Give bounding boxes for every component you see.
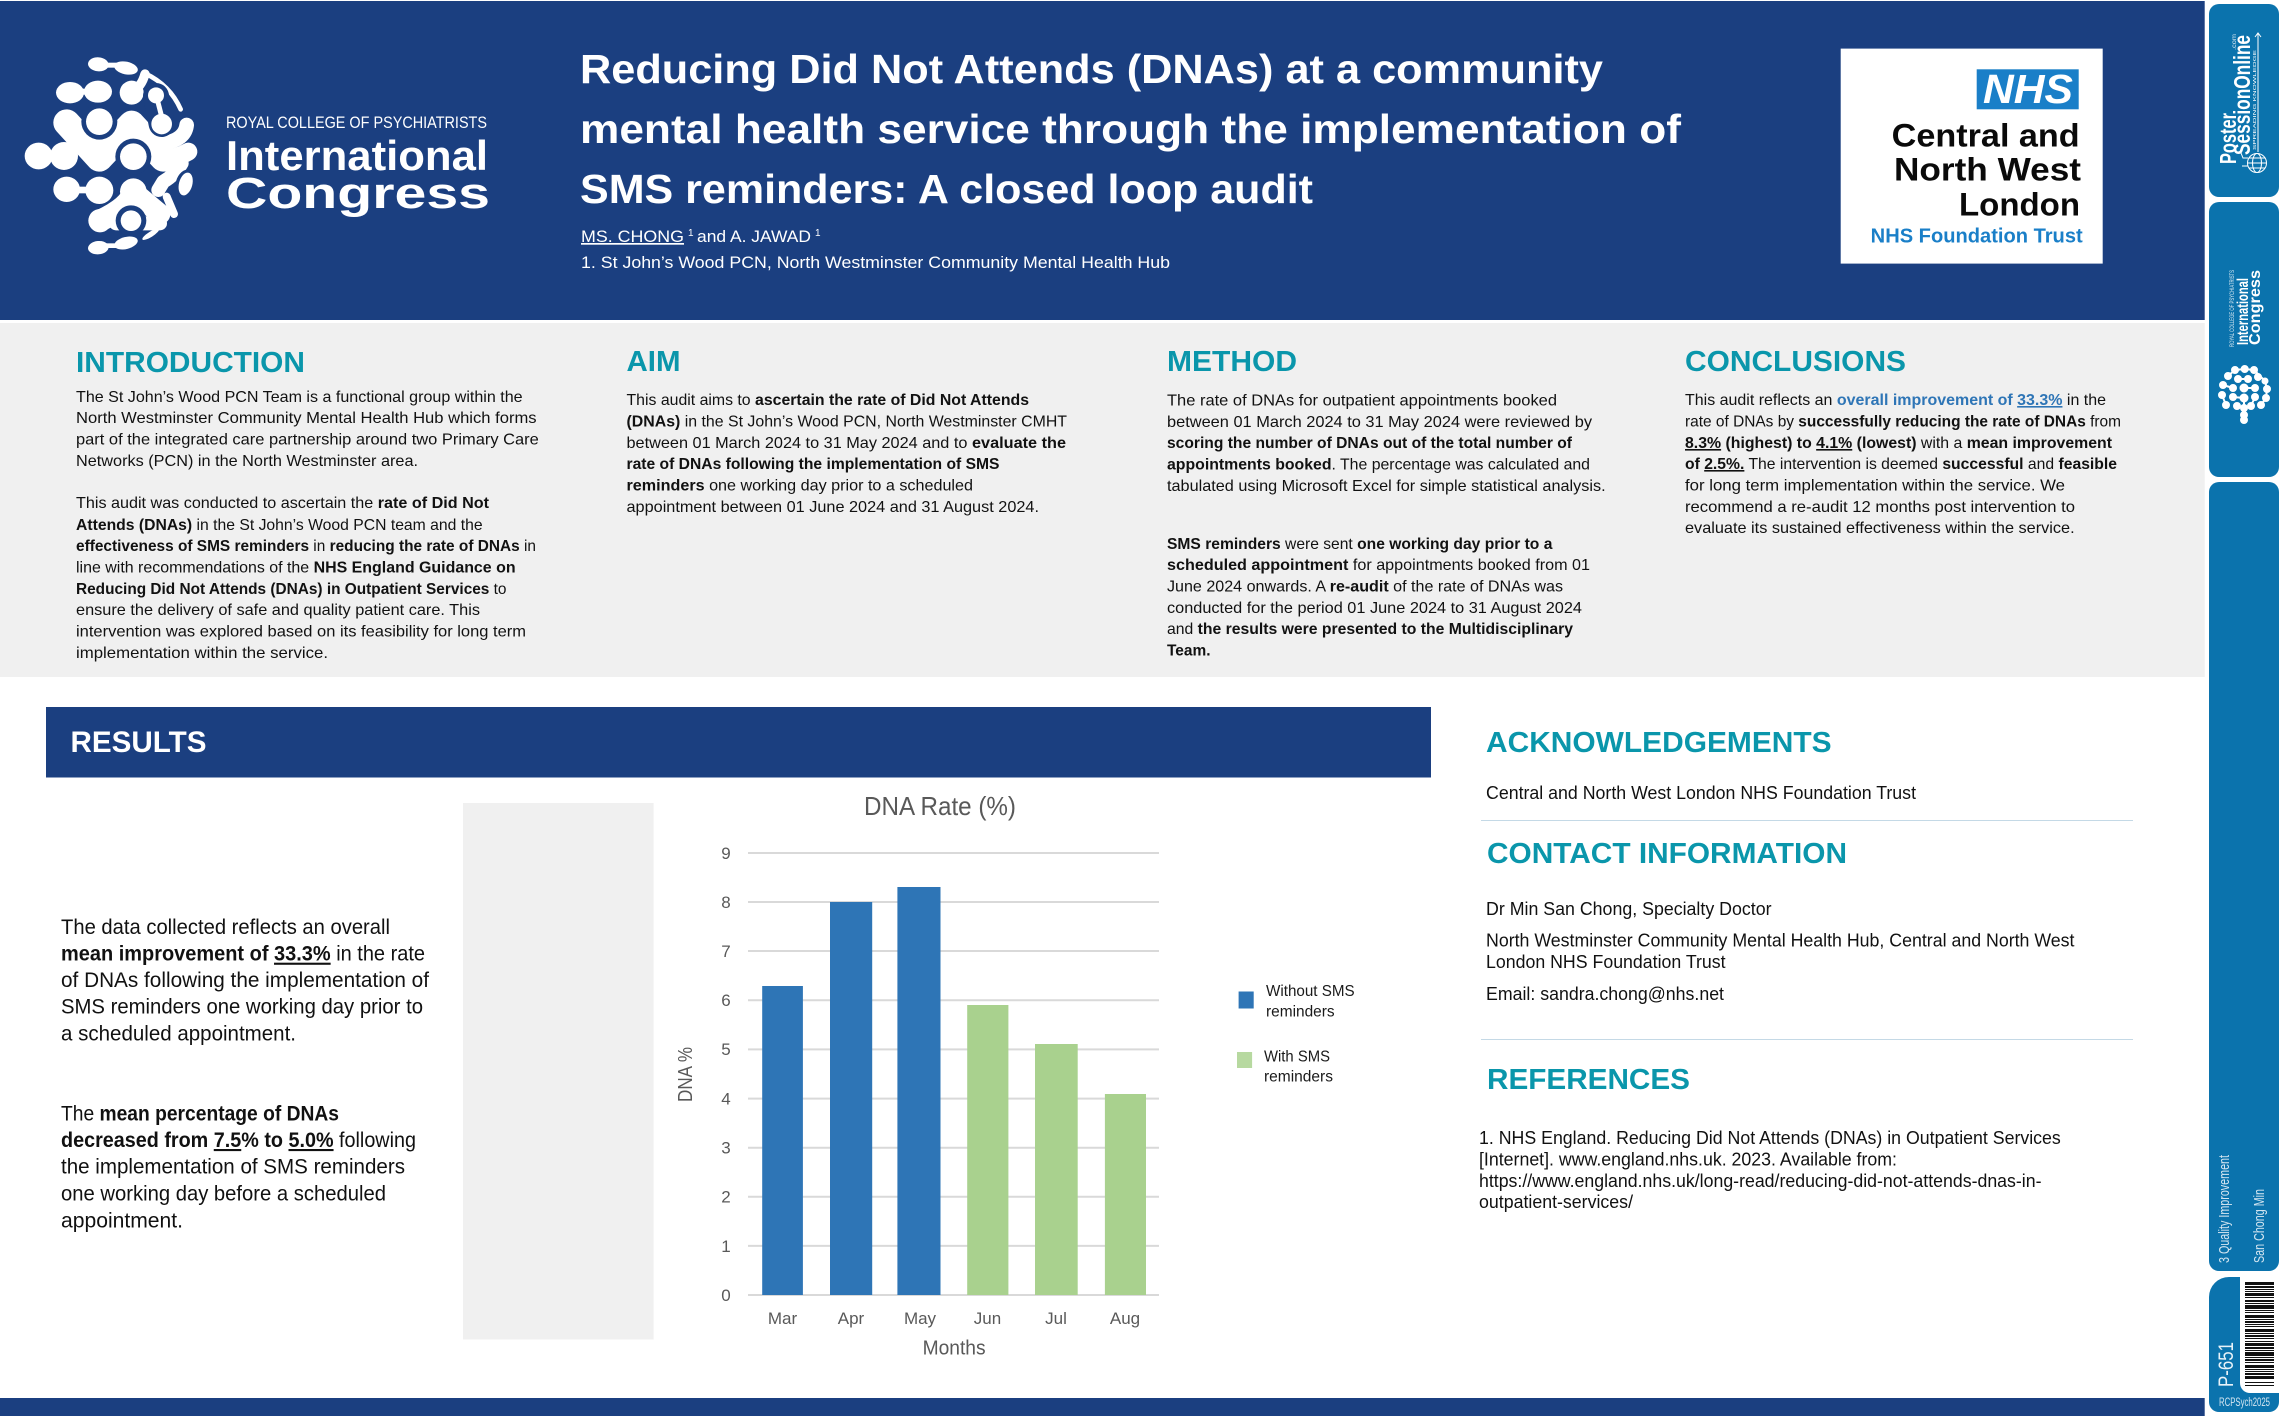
bars: without SMS reminders bbox=[762, 887, 940, 1295]
panel: references: outpatient-services/ bbox=[1479, 1192, 1633, 1212]
logo wordmark bbox=[226, 113, 490, 218]
text block: aim: appointment between 01 June 2024 and 31 August 2024. bbox=[626, 499, 1039, 516]
text block: introduction paragraph two: line with recommendations of the NHS England Guidance on bbox=[76, 560, 516, 576]
text block: conclusions bbox=[1685, 392, 2121, 537]
base shapes bbox=[67, 73, 188, 223]
sidebar tab: Poster Session Online: .com bbox=[2232, 34, 2238, 50]
heading: conclusions: CONCLUSIONS bbox=[1685, 346, 1906, 378]
heading: results bar: RESULTS bbox=[70, 726, 206, 759]
logo: NHS Central and North West London bbox=[1841, 49, 2103, 264]
text block: conclusions: 8.3% (highest) to 4.1% (lowest) with a mean improvement bbox=[1685, 435, 2113, 452]
legend: With SMS bbox=[1264, 1048, 1330, 1066]
text block: method paragraph two: June 2024 onwards. A re-audit of the rate of DNAs was bbox=[1167, 578, 1563, 596]
y axis labels: 0 bbox=[721, 1286, 731, 1305]
sidebar tab: poster number and barcode: P-651 bbox=[2215, 1342, 2238, 1387]
y axis labels: 9 bbox=[721, 844, 731, 863]
text block: method paragraph two: scheduled appointment for appointments booked from 01 bbox=[1167, 557, 1590, 574]
logo: NHS Central and North West London: London bbox=[1959, 187, 2080, 223]
text block: introduction paragraph one: Networks (PCN) in the North Westminster area. bbox=[76, 453, 418, 470]
text block: aim: rate of DNAs following the implementation of SMS bbox=[626, 456, 1000, 473]
top dumbbell bbox=[87, 56, 109, 72]
text block: conclusions: of 2.5%. The intervention is deemed successful and feasible bbox=[1685, 456, 2117, 473]
heading: aim: AIM bbox=[626, 346, 680, 378]
y axis labels: 8 bbox=[721, 893, 731, 912]
title: SMS reminders: A closed loop audit bbox=[580, 166, 1313, 212]
text block: method paragraph one: The rate of DNAs for outpatient appointments booked bbox=[1167, 392, 1557, 410]
y axis labels: 7 bbox=[721, 942, 731, 961]
panel: references: 1. NHS England. Reducing Did Not Attends (DNAs) in Outpatient Services bbox=[1479, 1128, 2061, 1148]
text block: introduction paragraph one bbox=[76, 389, 539, 470]
logo wordmark: ROYAL COLLEGE OF PSYCHIATRISTS bbox=[226, 113, 487, 132]
text block: introduction paragraph two: intervention was explored based on its feasibility for long term bbox=[76, 624, 526, 640]
panel: references: https://www.england.nhs.uk/long-read/reducing-did-not-attends-dnas-in- bbox=[1479, 1171, 2042, 1191]
y axis labels: 1 bbox=[721, 1237, 731, 1256]
x axis labels: May bbox=[904, 1309, 937, 1328]
text block: introduction paragraph one: North Westminster Community Mental Health Hub which forms bbox=[76, 410, 537, 427]
panel: contact information: London NHS Foundation Trust bbox=[1486, 952, 1726, 972]
y axis labels: 4 bbox=[721, 1090, 731, 1108]
text block: introduction paragraph one: The St John’s Wood PCN Team is a functional group within the bbox=[76, 389, 523, 406]
title bbox=[580, 46, 1681, 212]
icon: small globe bbox=[2219, 366, 2270, 423]
y axis title: DNA % bbox=[675, 1047, 697, 1102]
text block: conclusions: for long term implementation within the service. We bbox=[1685, 478, 2065, 494]
panel: contact information: Dr Min San Chong, Specialty Doctor bbox=[1486, 899, 1772, 919]
authors: 1 bbox=[688, 228, 694, 239]
x axis labels: Apr bbox=[838, 1309, 865, 1328]
text block: results mean percentage bbox=[61, 1102, 416, 1232]
text block: aim: (DNAs) in the St John’s Wood PCN, North Westminster CMHT bbox=[626, 414, 1067, 430]
barcode bbox=[2245, 1282, 2274, 1387]
bars: with SMS reminders bbox=[967, 1005, 1146, 1295]
footer bar bbox=[0, 1398, 2205, 1416]
panel: references: REFERENCES bbox=[1487, 1064, 1690, 1096]
logo: Royal College of Psychiatrists International Congress bbox=[25, 56, 490, 255]
text block: introduction paragraph two bbox=[76, 495, 536, 662]
x axis labels bbox=[768, 1309, 1140, 1328]
bottom dumbbell bbox=[87, 240, 109, 255]
sidebar tab: category and author bbox=[2209, 482, 2279, 1271]
sidebar tab: International Congress: ROYAL COLLEGE OF PSYCHIATRISTS bbox=[2230, 270, 2236, 347]
legend: reminders bbox=[1266, 1004, 1335, 1020]
panel: results bbox=[46, 707, 1431, 1360]
text block: method paragraph two: and the results were presented to the Multidisciplinary bbox=[1167, 621, 1573, 638]
y axis labels: 5 bbox=[721, 1040, 731, 1059]
panel: references: [Internet]. www.england.nhs.uk. 2023. Available from: bbox=[1479, 1150, 1897, 1170]
text block: aim: This audit aims to ascertain the rate of Did Not Attends bbox=[626, 392, 1029, 409]
text block: results overall improvement: of DNAs following the implementation of bbox=[61, 969, 429, 992]
sidebar tab: poster number and barcode bbox=[2209, 1277, 2279, 1412]
header banner bbox=[0, 1, 2205, 320]
x axis labels: Jun bbox=[974, 1309, 1001, 1328]
text block: method paragraph one: scoring the number of DNAs out of the total number of bbox=[1167, 435, 1573, 452]
text block: aim: between 01 March 2024 to 31 May 2024 and to evaluate the bbox=[626, 435, 1066, 452]
row three dumbbell bbox=[25, 143, 53, 169]
text block: results mean percentage: the implementation of SMS reminders bbox=[61, 1156, 405, 1178]
panel: conclusions bbox=[1685, 346, 2121, 537]
panel: introduction bbox=[76, 347, 539, 662]
text block: method paragraph one bbox=[1167, 392, 1606, 495]
logo wordmark: Congress bbox=[226, 169, 490, 218]
text block: conclusions: rate of DNAs by successfully reducing the rate of DNAs from bbox=[1685, 414, 2121, 430]
logo: NHS Central and North West London: NHS Foundation Trust bbox=[1871, 226, 2083, 248]
text block: method paragraph one: appointments booked. The percentage was calculated and bbox=[1167, 456, 1590, 474]
chart title: DNA Rate (%) bbox=[864, 791, 1016, 821]
panel: acknowledgements: Central and North West London NHS Foundation Trust bbox=[1486, 783, 1916, 803]
authors bbox=[581, 227, 821, 246]
authors: 1 bbox=[815, 228, 821, 239]
row one dumbbell bbox=[56, 82, 84, 103]
panel: method bbox=[1167, 346, 1606, 660]
text block: introduction paragraph two: This audit was conducted to ascertain the rate of Did Not bbox=[76, 495, 490, 512]
text block: introduction paragraph two: implementation within the service. bbox=[76, 645, 328, 662]
y axis labels bbox=[721, 844, 731, 1305]
icon: globe bbox=[2241, 153, 2266, 172]
text block: results mean percentage: decreased from 7.5% to 5.0% following bbox=[61, 1129, 416, 1152]
logo: NHS Central and North West London: NHS bbox=[1983, 66, 2073, 112]
panel: contact information: North Westminster Community Mental Health Hub, Central and North West bbox=[1486, 931, 2074, 951]
sidebar tab: category and author: San Chong Min bbox=[2252, 1189, 2268, 1263]
text block: results mean percentage: appointment. bbox=[61, 1210, 183, 1232]
panel: acknowledgements bbox=[1486, 727, 1916, 803]
bar chart: DNA rate bbox=[675, 791, 1355, 1360]
panel: contact information: CONTACT INFORMATION bbox=[1487, 838, 1847, 870]
affiliation: 1. St John’s Wood PCN, North Westminster Community Mental Health Hub bbox=[581, 253, 1170, 272]
title: Reducing Did Not Attends (DNAs) at a community bbox=[580, 46, 1603, 92]
authors: MS. CHONG bbox=[581, 227, 684, 246]
text block: results overall improvement: a scheduled appointment. bbox=[61, 1022, 296, 1046]
navy gaps bbox=[156, 96, 162, 124]
heading: introduction: INTRODUCTION bbox=[76, 347, 305, 379]
text block: results mean percentage: The mean percentage of DNAs bbox=[61, 1102, 339, 1126]
panel: summary band bbox=[0, 323, 2205, 677]
text block: results overall improvement: mean improvement of 33.3% in the rate bbox=[61, 943, 425, 966]
sidebar tab: International Congress: International bbox=[2235, 278, 2252, 345]
text block: results overall improvement bbox=[61, 916, 429, 1046]
y axis labels: 6 bbox=[721, 991, 731, 1010]
panel: acknowledgements: ACKNOWLEDGEMENTS bbox=[1486, 727, 1832, 759]
panel: aim bbox=[626, 346, 1067, 516]
grey placeholder panel bbox=[463, 803, 654, 1340]
panel: contact information bbox=[1486, 838, 2074, 1004]
panel: contact information: Email: sandra.chong@nhs.net bbox=[1486, 984, 1724, 1004]
x axis labels: Aug bbox=[1110, 1309, 1140, 1328]
text block: introduction paragraph two: effectiveness of SMS reminders in reducing the rate of DNAs in bbox=[76, 538, 536, 555]
logo: NHS Central and North West London: Central and bbox=[1892, 118, 2080, 154]
y axis labels: 3 bbox=[721, 1138, 731, 1158]
legend bbox=[1237, 983, 1355, 1086]
logo wordmark: International bbox=[226, 132, 488, 179]
dumbbell inside gap bbox=[148, 87, 164, 103]
sidebar tab: International Congress bbox=[2209, 202, 2279, 477]
text block: results overall improvement: SMS reminders one working day prior to bbox=[61, 996, 423, 1018]
text block: conclusions: This audit reflects an overall improvement of 33.3% in the bbox=[1685, 392, 2106, 409]
text block: method paragraph two: conducted for the period 01 June 2024 to 31 August 2024 bbox=[1167, 600, 1582, 617]
sidebar tab: Poster Session Online: SessionOnline bbox=[2229, 35, 2255, 155]
logo: NHS Central and North West London: North West bbox=[1894, 152, 2081, 188]
text block: results mean percentage: one working day before a scheduled bbox=[61, 1182, 386, 1206]
authors: and A. JAWAD bbox=[697, 227, 811, 246]
sidebar tab: Poster Session Online: Poster bbox=[2215, 113, 2241, 164]
text block: conclusions: evaluate its sustained effectiveness within the service. bbox=[1685, 520, 2075, 537]
text block: introduction paragraph two: ensure the delivery of safe and quality patient care. This bbox=[76, 602, 480, 619]
icon: brain globe bbox=[25, 56, 199, 255]
x axis title: Months bbox=[923, 1338, 986, 1360]
sidebar bbox=[2209, 4, 2279, 1412]
panel: references bbox=[1479, 1064, 2061, 1212]
text block: method paragraph two bbox=[1167, 536, 1590, 660]
text block: introduction paragraph two: Reducing Did Not Attends (DNAs) in Outpatient Services to bbox=[76, 581, 507, 598]
text block: method paragraph one: between 01 March 2024 to 31 May 2024 were reviewed by bbox=[1167, 414, 1592, 431]
heading: results bar bbox=[46, 707, 1431, 778]
text block: method paragraph one: tabulated using Microsoft Excel for simple statistical analysis. bbox=[1167, 478, 1606, 495]
x axis labels: Mar bbox=[768, 1309, 797, 1328]
legend: reminders bbox=[1264, 1068, 1333, 1086]
text block: conclusions: recommend a re-audit 12 months post intervention to bbox=[1685, 499, 2075, 516]
text block: introduction paragraph one: part of the integrated care partnership around two Primary Care bbox=[76, 432, 539, 448]
title: mental health service through the implementation of bbox=[580, 106, 1681, 152]
heading: method: METHOD bbox=[1167, 346, 1297, 378]
sidebar tab: Poster Session Online: SPREADING KNOWLEDGE bbox=[2252, 50, 2257, 150]
text block: results overall improvement: The data collected reflects an overall bbox=[61, 916, 390, 939]
legend: Without SMS bbox=[1266, 983, 1355, 1000]
sidebar tab: Poster Session Online bbox=[2209, 4, 2279, 197]
y axis labels: 2 bbox=[721, 1188, 731, 1206]
text block: method paragraph two: SMS reminders were sent one working day prior to a bbox=[1167, 536, 1552, 553]
text block: introduction paragraph two: Attends (DNAs) in the St John’s Wood PCN team and the bbox=[76, 517, 483, 534]
sidebar tab: International Congress: Congress bbox=[2247, 270, 2264, 345]
row four dumbbell bbox=[53, 177, 80, 202]
text block: aim: reminders one working day prior to a scheduled bbox=[626, 478, 973, 494]
text block: method paragraph two: Team. bbox=[1167, 642, 1210, 660]
text block: aim bbox=[626, 392, 1067, 516]
x axis labels: Jul bbox=[1045, 1309, 1067, 1328]
sidebar tab: category and author: 3 Quality Improvement bbox=[2217, 1155, 2233, 1263]
